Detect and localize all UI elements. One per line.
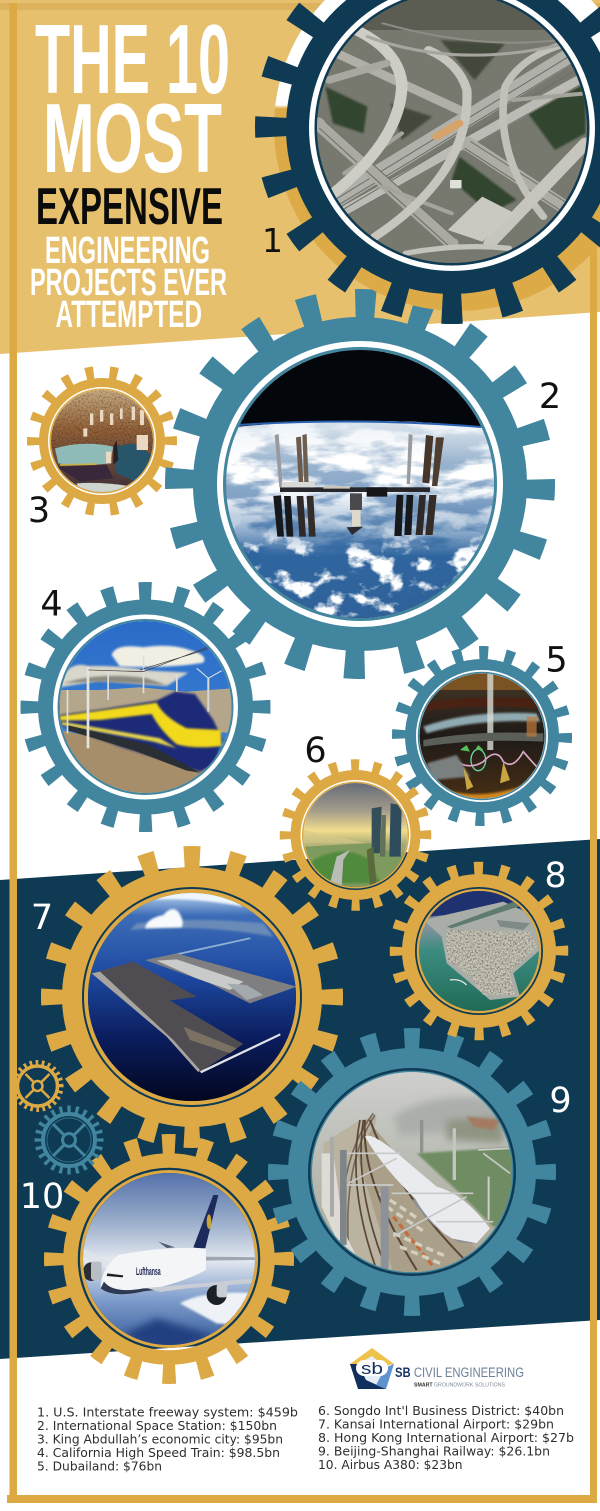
background: gold header band bbox=[0, 0, 600, 354]
number 9: 9 bbox=[549, 1081, 572, 1121]
photo: island airport bbox=[419, 891, 539, 1011]
logo tagline: SMART GROUNDWORK SOLUTIONS bbox=[414, 1382, 505, 1388]
photo: airliner bbox=[83, 1173, 255, 1345]
title line: EXPENSIVE: EXPENSIVE bbox=[36, 178, 223, 236]
small teal cog bbox=[38, 1110, 100, 1170]
gear 10: Airbus A380 bbox=[54, 1144, 284, 1374]
number 7: 7 bbox=[31, 898, 53, 938]
photo: theme park at night bbox=[420, 674, 544, 798]
small gold cog bbox=[14, 1062, 61, 1110]
number 4: 4 bbox=[40, 584, 63, 624]
logo wordmark: SB CIVIL ENGINEERING bbox=[395, 1365, 524, 1380]
cost list: projects 1-5: 5. Dubailand: $76bn bbox=[37, 1460, 162, 1474]
background: navy lower band bbox=[0, 839, 600, 1359]
gear 3: King Abdullah's economic city bbox=[34, 372, 170, 510]
gear 7: Kansai International Airport bbox=[52, 857, 332, 1137]
gear 8: Hong Kong International Airport bbox=[396, 868, 562, 1034]
number 2: 2 bbox=[539, 377, 561, 417]
number 3: 3 bbox=[28, 491, 50, 531]
gear 5: Dubailand bbox=[397, 651, 567, 821]
cost list: projects 6-10: 8. Hong Kong International Airport: $27bn bbox=[318, 1431, 582, 1445]
gear 2: International Space Station bbox=[175, 299, 545, 669]
photo: high speed rail bbox=[310, 1070, 517, 1277]
photo: bullet train bbox=[57, 617, 237, 797]
number 1: 1 bbox=[262, 221, 283, 260]
gear 1 shadow arc bbox=[274, 0, 600, 311]
number 10: 10 bbox=[20, 1177, 64, 1217]
gear 4: California High Speed Train bbox=[30, 591, 261, 823]
logo pentagon mark: sb bbox=[361, 1359, 383, 1378]
title line: MOST: MOST bbox=[43, 83, 222, 193]
gear 9: Beijing-Shanghai Railway bbox=[278, 1038, 546, 1306]
cost list: projects 1-5: 4. California High Speed Train: $98.5bn bbox=[37, 1446, 280, 1460]
photo: airliner: Lufthansa bbox=[136, 1266, 161, 1278]
number 8: 8 bbox=[544, 856, 567, 896]
gear 6: Songdo International Business District bbox=[286, 765, 425, 905]
photo: artificial island airport bbox=[87, 890, 300, 1103]
space station bbox=[273, 434, 444, 537]
cost list: projects 1-5: 3. King Abdullah’s economic city: $95bn bbox=[37, 1432, 283, 1446]
rank numbers bbox=[20, 221, 572, 1217]
cost list: projects 6-10: 6. Songdo Int'l Business District: $40bn bbox=[318, 1404, 564, 1418]
photo: freeway interchange bbox=[310, 0, 593, 267]
logo: SB Civil Engineering bbox=[350, 1348, 524, 1389]
cost list: projects 1-5: 1. U.S. Interstate freeway system: $459bn bbox=[37, 1406, 306, 1420]
gear 1: U.S. Interstate freeway system bbox=[272, 0, 600, 308]
title line: THE 10: THE 10 bbox=[35, 4, 230, 114]
title line: PROJECTS EVER: PROJECTS EVER bbox=[30, 262, 227, 304]
title line: ATTEMPTED: ATTEMPTED bbox=[56, 294, 202, 336]
cost list: projects 6-10: 7. Kansai International Airport: $29bn bbox=[318, 1418, 554, 1432]
photo: coastal city bbox=[51, 390, 153, 492]
title line: ENGINEERING: ENGINEERING bbox=[45, 230, 210, 272]
cost list: projects 1-5 bbox=[37, 1406, 306, 1474]
photo: space station over earth bbox=[223, 347, 497, 623]
cost list: projects 6-10: 9. Beijing-Shanghai Railway: $26.1bn bbox=[318, 1444, 550, 1458]
number 5: 5 bbox=[545, 640, 568, 680]
number 6: 6 bbox=[304, 731, 327, 771]
cost list: projects 1-5: 2. International Space Station: $150bn bbox=[37, 1419, 277, 1433]
cost list: projects 6-10: 10. Airbus A380: $23bn bbox=[318, 1458, 462, 1472]
logo pentagon mark bbox=[350, 1348, 394, 1389]
title bbox=[30, 4, 230, 336]
cost list: projects 6-10 bbox=[318, 1404, 582, 1472]
photo: skyscrapers at sunset bbox=[303, 780, 410, 890]
